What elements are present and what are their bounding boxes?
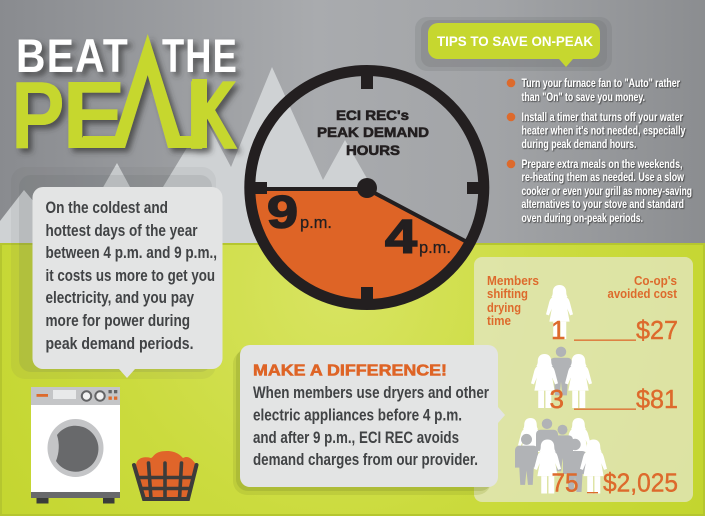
row: 3 members, $81: 3 bbox=[550, 384, 564, 414]
title: THE: THE bbox=[162, 29, 238, 82]
row: 1 member, $27: 1 bbox=[551, 315, 565, 345]
panel label: members shifting drying time: drying bbox=[487, 300, 521, 315]
callout text: between 4 p.m. and 9 p.m., bbox=[46, 243, 217, 262]
background: gray sky bbox=[0, 0, 705, 245]
tips callout bbox=[415, 17, 612, 71]
clock: 4 p.m. label: p.m. bbox=[419, 238, 451, 257]
row: 75 members, $2,025: 75 bbox=[552, 468, 578, 498]
bullet icons bbox=[507, 79, 515, 168]
title: PEAK: E bbox=[62, 62, 126, 169]
callout heading: MAKE A DIFFERENCE! bbox=[253, 362, 447, 380]
clock: 9 p.m. label: p.m. bbox=[300, 213, 332, 232]
panel label: co-op's avoided cost: avoided cost bbox=[608, 286, 678, 301]
clock: hands bbox=[256, 189, 467, 242]
callout text: and after 9 p.m., ECI REC avoids bbox=[253, 428, 459, 447]
row: 1 member, $27: $27 bbox=[636, 315, 678, 345]
title: PEAK: P bbox=[11, 61, 65, 169]
icon: washing machine bbox=[31, 387, 120, 504]
callout text: On the coldest and bbox=[46, 198, 168, 217]
clock: tick marks bbox=[250, 72, 484, 304]
callout: coldest and hottest days bbox=[11, 167, 222, 379]
panel label: members shifting drying time: time bbox=[487, 313, 511, 328]
title: PEAK: A bbox=[118, 94, 161, 161]
tips text: than "On" to save you money. bbox=[522, 90, 645, 104]
clock: heading: ECI REC's bbox=[336, 107, 409, 123]
callout text: more for power during bbox=[46, 311, 190, 330]
icon: laundry basket bbox=[134, 451, 197, 500]
tips text: oven during on-peak periods. bbox=[522, 211, 643, 225]
clock: orange peak sector bbox=[255, 189, 469, 309]
panel label: members shifting drying time: Members bbox=[487, 273, 539, 288]
clock: 4 p.m. label: 4 bbox=[385, 210, 417, 262]
clock: 9 p.m. label: 9 bbox=[267, 186, 298, 238]
clock: heading: HOURS bbox=[346, 142, 400, 158]
clock bbox=[250, 70, 484, 309]
clock: 9 p.m. label bbox=[267, 186, 332, 238]
clock: 4 p.m. label bbox=[385, 210, 451, 262]
title: PEAK: K bbox=[187, 61, 237, 169]
panel label: co-op's avoided cost: Co-op's bbox=[634, 273, 677, 288]
callout: make a difference bbox=[233, 345, 505, 495]
panel label: members shifting drying time: shifting bbox=[487, 286, 528, 301]
tips text: during peak demand hours. bbox=[522, 137, 636, 151]
background: mountains bbox=[0, 67, 405, 245]
clock: heading bbox=[317, 107, 429, 158]
panel label: co-op's avoided cost bbox=[608, 273, 678, 301]
callout text: demand charges from our provider. bbox=[253, 450, 478, 469]
row: 1 member, $27 bbox=[546, 285, 678, 345]
panel: members and avoided cost bbox=[474, 257, 693, 502]
row: 75 members, $2,025: $2,025 bbox=[603, 468, 678, 498]
callout text: peak demand periods. bbox=[46, 334, 194, 353]
callout text: electricity, and you pay bbox=[46, 288, 195, 307]
callout text bbox=[46, 198, 217, 353]
callout text: it costs us more to get you bbox=[46, 266, 215, 285]
row: 75 members, $2,025 bbox=[515, 418, 678, 498]
title: BEAT: BEAT bbox=[16, 29, 129, 82]
row: 3 members, $81: $81 bbox=[636, 384, 678, 414]
clock: heading: PEAK DEMAND bbox=[317, 124, 429, 140]
background: lime ground bbox=[0, 243, 705, 516]
row: 3 members, $81 bbox=[531, 347, 678, 414]
tips list bbox=[507, 76, 692, 225]
callout text: electric appliances before 4 p.m. bbox=[253, 406, 462, 424]
panel label: members shifting drying time bbox=[487, 273, 539, 328]
callout text: hottest days of the year bbox=[46, 221, 198, 240]
clock: hub bbox=[357, 178, 377, 198]
tips heading: TIPS TO SAVE ON-PEAK bbox=[437, 33, 593, 49]
tips text bbox=[522, 76, 692, 225]
title: PEAK bbox=[11, 34, 237, 169]
callout text: When members use dryers and other bbox=[253, 383, 489, 402]
title bbox=[11, 29, 238, 169]
clock: rim bbox=[250, 70, 484, 304]
callout text bbox=[253, 383, 489, 469]
